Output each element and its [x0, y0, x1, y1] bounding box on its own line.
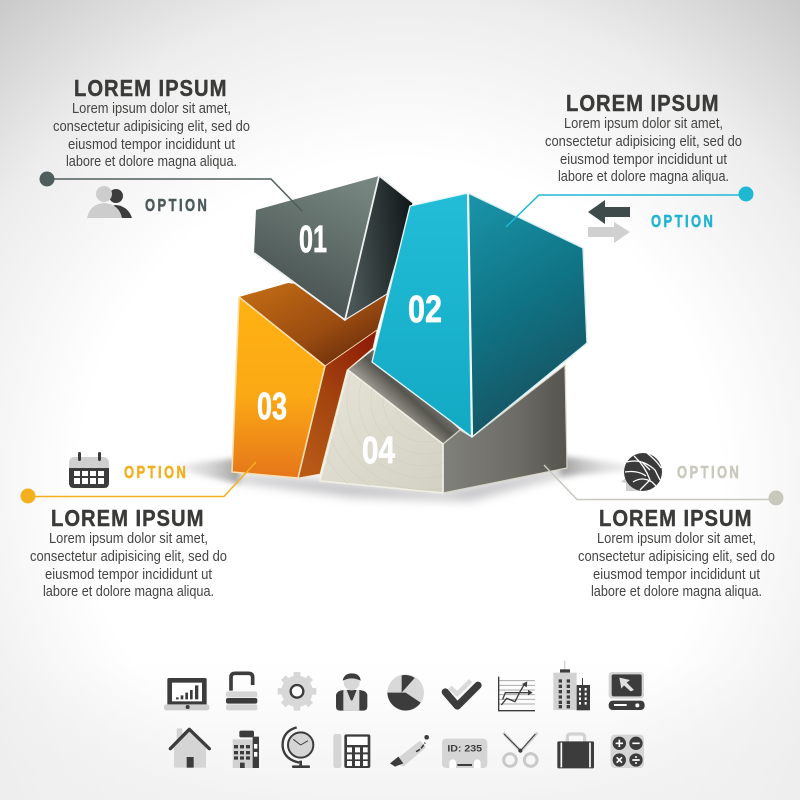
- callout 2: top right: [506, 90, 754, 243]
- number 03: 03: [257, 386, 287, 428]
- body text 1: Lorem ipsum dolor sit amet,: [72, 100, 231, 117]
- icon: pie chart: [387, 674, 424, 711]
- callout 3: bottom left: [20, 452, 256, 600]
- icon: open lock: [226, 673, 257, 710]
- body text 1: [53, 100, 250, 170]
- option label 1: OPTION: [145, 196, 209, 216]
- icon: office building: [233, 731, 259, 768]
- icon: globe clock: [283, 727, 313, 768]
- number 02: 02: [408, 289, 442, 331]
- body text 3: consectetur adipisicing elit, sed do: [30, 548, 227, 565]
- icon: scissors: [503, 733, 537, 766]
- body text 1: labore et dolore magna aliqua.: [66, 153, 237, 170]
- icon: head with network: [621, 453, 662, 491]
- option label 3: OPTION: [124, 463, 188, 483]
- heading 4: LOREM IPSUM: [599, 505, 752, 531]
- body text 4: labore et dolore magna aliqua.: [591, 583, 762, 600]
- option label 2: OPTION: [651, 212, 715, 232]
- icon: house: [170, 728, 209, 768]
- icon: calendar: [69, 452, 109, 488]
- block shadow: [172, 456, 645, 501]
- icon: gear: [278, 672, 316, 711]
- block 04: [319, 350, 568, 494]
- icon row: [164, 661, 645, 768]
- icon: computer cursor: [609, 672, 645, 710]
- callout 4: bottom right: [544, 453, 784, 600]
- body text 3: Lorem ipsum dolor sit amet,: [49, 530, 208, 547]
- body text 3: labore et dolore magna aliqua.: [43, 583, 214, 600]
- body text 2: labore et dolore magna aliqua.: [558, 168, 729, 185]
- icon: calculator: [333, 734, 370, 768]
- heading 3: LOREM IPSUM: [51, 505, 204, 531]
- leader line 2: [506, 186, 754, 227]
- body text 3: eiusmod tempor incididunt ut: [45, 566, 213, 583]
- icon: line chart: [499, 677, 535, 711]
- heading 2: LOREM IPSUM: [566, 90, 719, 116]
- body text 2: Lorem ipsum dolor sit amet,: [564, 115, 723, 132]
- body text 1: eiusmod tempor incididunt ut: [68, 136, 236, 153]
- 3D chart: segmented blocks: [232, 176, 587, 514]
- icon: pen: [390, 735, 429, 767]
- body text 2: eiusmod tempor incididunt ut: [560, 151, 728, 168]
- icon: laptop chart: [164, 678, 209, 710]
- icon: skyscrapers: [553, 661, 590, 710]
- icon: exchange arrows: [588, 200, 630, 243]
- icon: ID card: [442, 739, 487, 768]
- body text 2: consectetur adipisicing elit, sed do: [545, 133, 742, 150]
- body text 4: Lorem ipsum dolor sit amet,: [597, 530, 756, 547]
- block 03: [232, 283, 387, 478]
- number 01: 01: [299, 219, 327, 261]
- block 01: [254, 176, 413, 320]
- icon: briefcase: [557, 734, 594, 768]
- body text 4: eiusmod tempor incididunt ut: [593, 566, 761, 583]
- option label 4: OPTION: [677, 463, 741, 483]
- body text 1: consectetur adipisicing elit, sed do: [53, 118, 250, 135]
- block 02: [372, 193, 587, 437]
- icon: math operators: [611, 735, 644, 768]
- number 04: 04: [362, 430, 395, 472]
- body text 3: [30, 530, 227, 600]
- leader line 1: [40, 172, 302, 211]
- callout 1: top left: [40, 75, 302, 218]
- leader line 3: [20, 462, 256, 504]
- icon: check mark: [445, 681, 478, 706]
- icon: ID card: ID: 235: [447, 744, 482, 754]
- icon: people: [87, 186, 132, 218]
- body text 4: [578, 530, 775, 600]
- icon: businessman: [336, 673, 367, 711]
- heading 1: LOREM IPSUM: [74, 75, 227, 101]
- body text 2: [545, 115, 742, 185]
- body text 4: consectetur adipisicing elit, sed do: [578, 548, 775, 565]
- leader line 4: [544, 465, 784, 506]
